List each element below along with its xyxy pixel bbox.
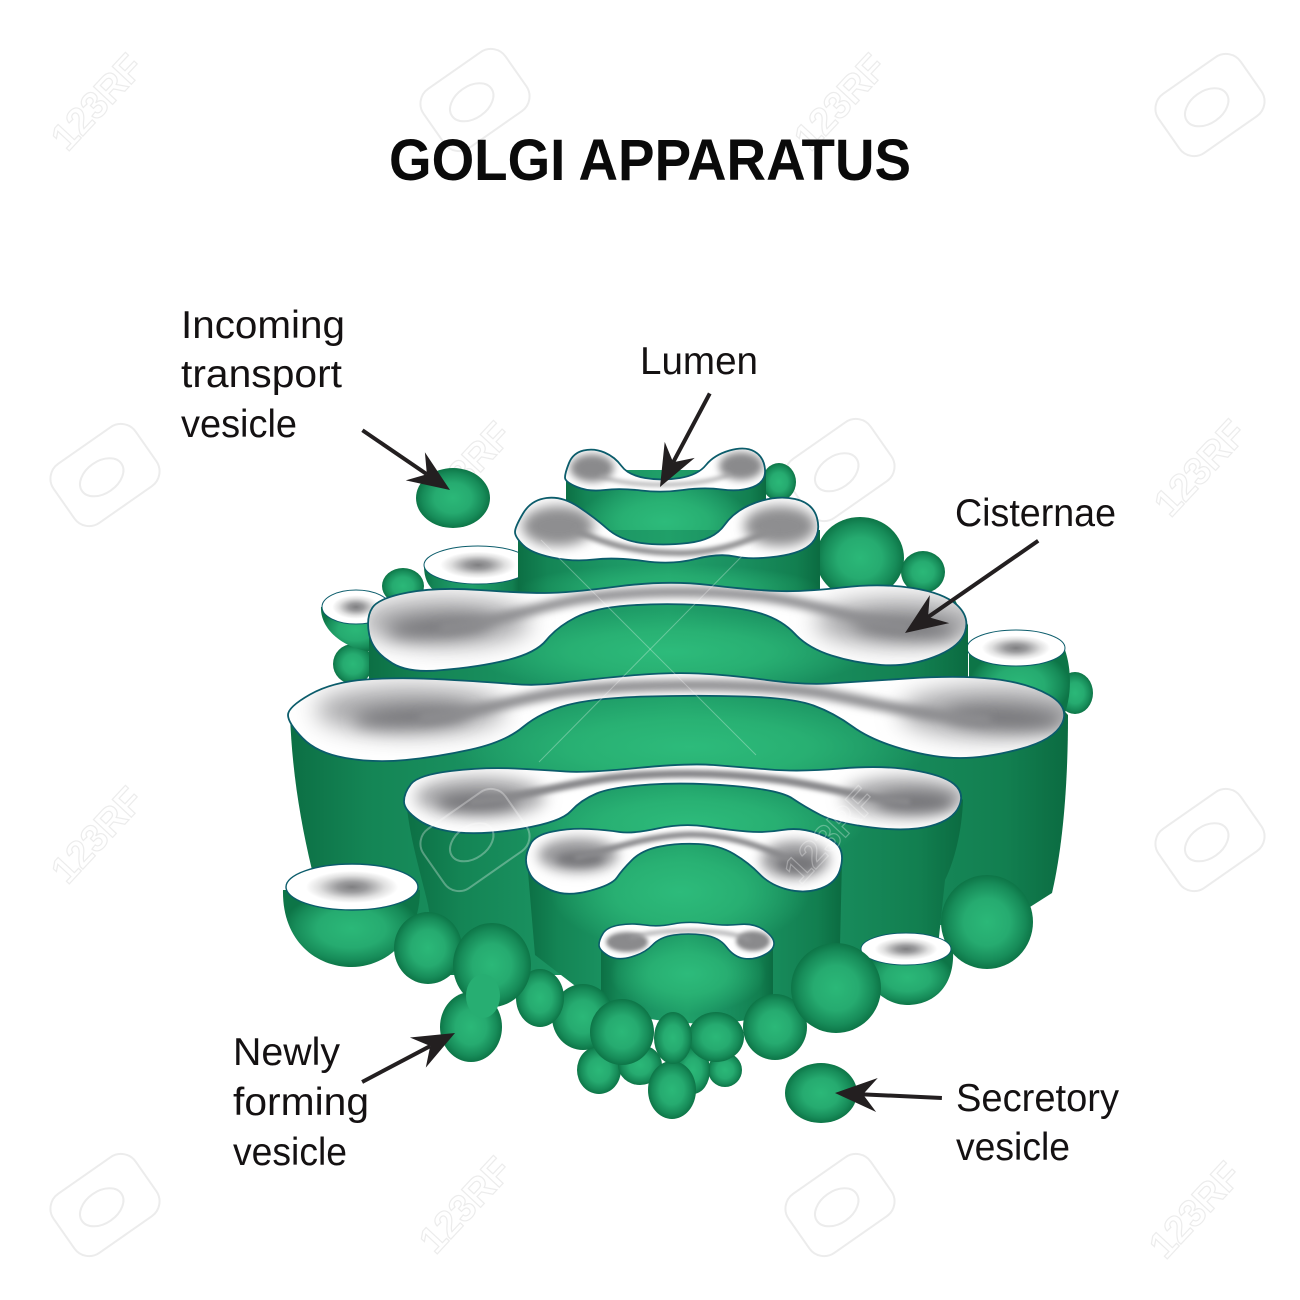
far left cup vesicle bbox=[321, 590, 390, 652]
label: incoming transport vesicle: Incoming bbox=[181, 304, 345, 347]
watermark pattern: 123RF bbox=[411, 1150, 520, 1262]
back vesicles bbox=[333, 463, 1093, 714]
watermark pattern: 123RF bbox=[1141, 1155, 1250, 1267]
title: GOLGI APPARATUS bbox=[389, 128, 911, 193]
cisterna tier 6 bbox=[526, 825, 842, 1005]
cisterna tier 7: bottom bbox=[599, 922, 774, 1023]
back cup vesicle left bbox=[424, 546, 532, 600]
right bottom vesicles bbox=[791, 875, 1033, 1033]
cisterna tier 5 bbox=[404, 764, 967, 975]
cisterna tier 4: largest bbox=[288, 673, 1090, 925]
watermark overlay bbox=[413, 540, 885, 898]
label: incoming transport vesicle: transport bbox=[181, 353, 342, 396]
newly forming vesicle bbox=[440, 974, 502, 1062]
arrow: cisternae bbox=[895, 527, 1048, 647]
cisterna tier 1: top bbox=[564, 448, 766, 530]
label: incoming transport vesicle: vesicle bbox=[181, 403, 297, 446]
incoming transport vesicle bbox=[416, 468, 490, 528]
label: newly forming vesicle: forming bbox=[233, 1081, 369, 1124]
secretory vesicle bbox=[785, 1063, 857, 1123]
label: secretory vesicle: vesicle bbox=[956, 1126, 1070, 1169]
arrow: newly forming vesicle bbox=[354, 1018, 463, 1097]
left cup vesicle bbox=[283, 864, 420, 967]
label: secretory vesicle: Secretory bbox=[956, 1077, 1119, 1120]
label: lumen: Lumen bbox=[640, 340, 758, 383]
label: cisternae: Cisternae bbox=[955, 492, 1116, 535]
golgi apparatus diagram bbox=[283, 448, 1093, 1123]
arrow: incoming transport vesicle bbox=[353, 416, 460, 504]
right cup vesicle bbox=[967, 630, 1070, 720]
watermark overlay: 123RF bbox=[776, 780, 885, 892]
arrow: secretory vesicle bbox=[834, 1076, 943, 1115]
label: newly forming vesicle: Newly bbox=[233, 1031, 340, 1074]
cisterna tier 3 bbox=[367, 582, 968, 684]
cisterna tier 2 bbox=[514, 496, 820, 592]
left bottom vesicles bbox=[394, 912, 531, 1007]
watermark pattern: 123RF bbox=[43, 780, 152, 892]
watermark pattern: 123RF bbox=[786, 47, 895, 159]
watermark pattern: 123RF bbox=[1146, 413, 1255, 525]
watermark pattern: 123RF bbox=[411, 415, 520, 527]
watermark pattern: 123RF bbox=[43, 47, 152, 159]
label: newly forming vesicle: vesicle bbox=[233, 1131, 347, 1174]
arrow: lumen bbox=[645, 385, 725, 495]
vesicle cluster bottom bbox=[516, 969, 807, 1119]
